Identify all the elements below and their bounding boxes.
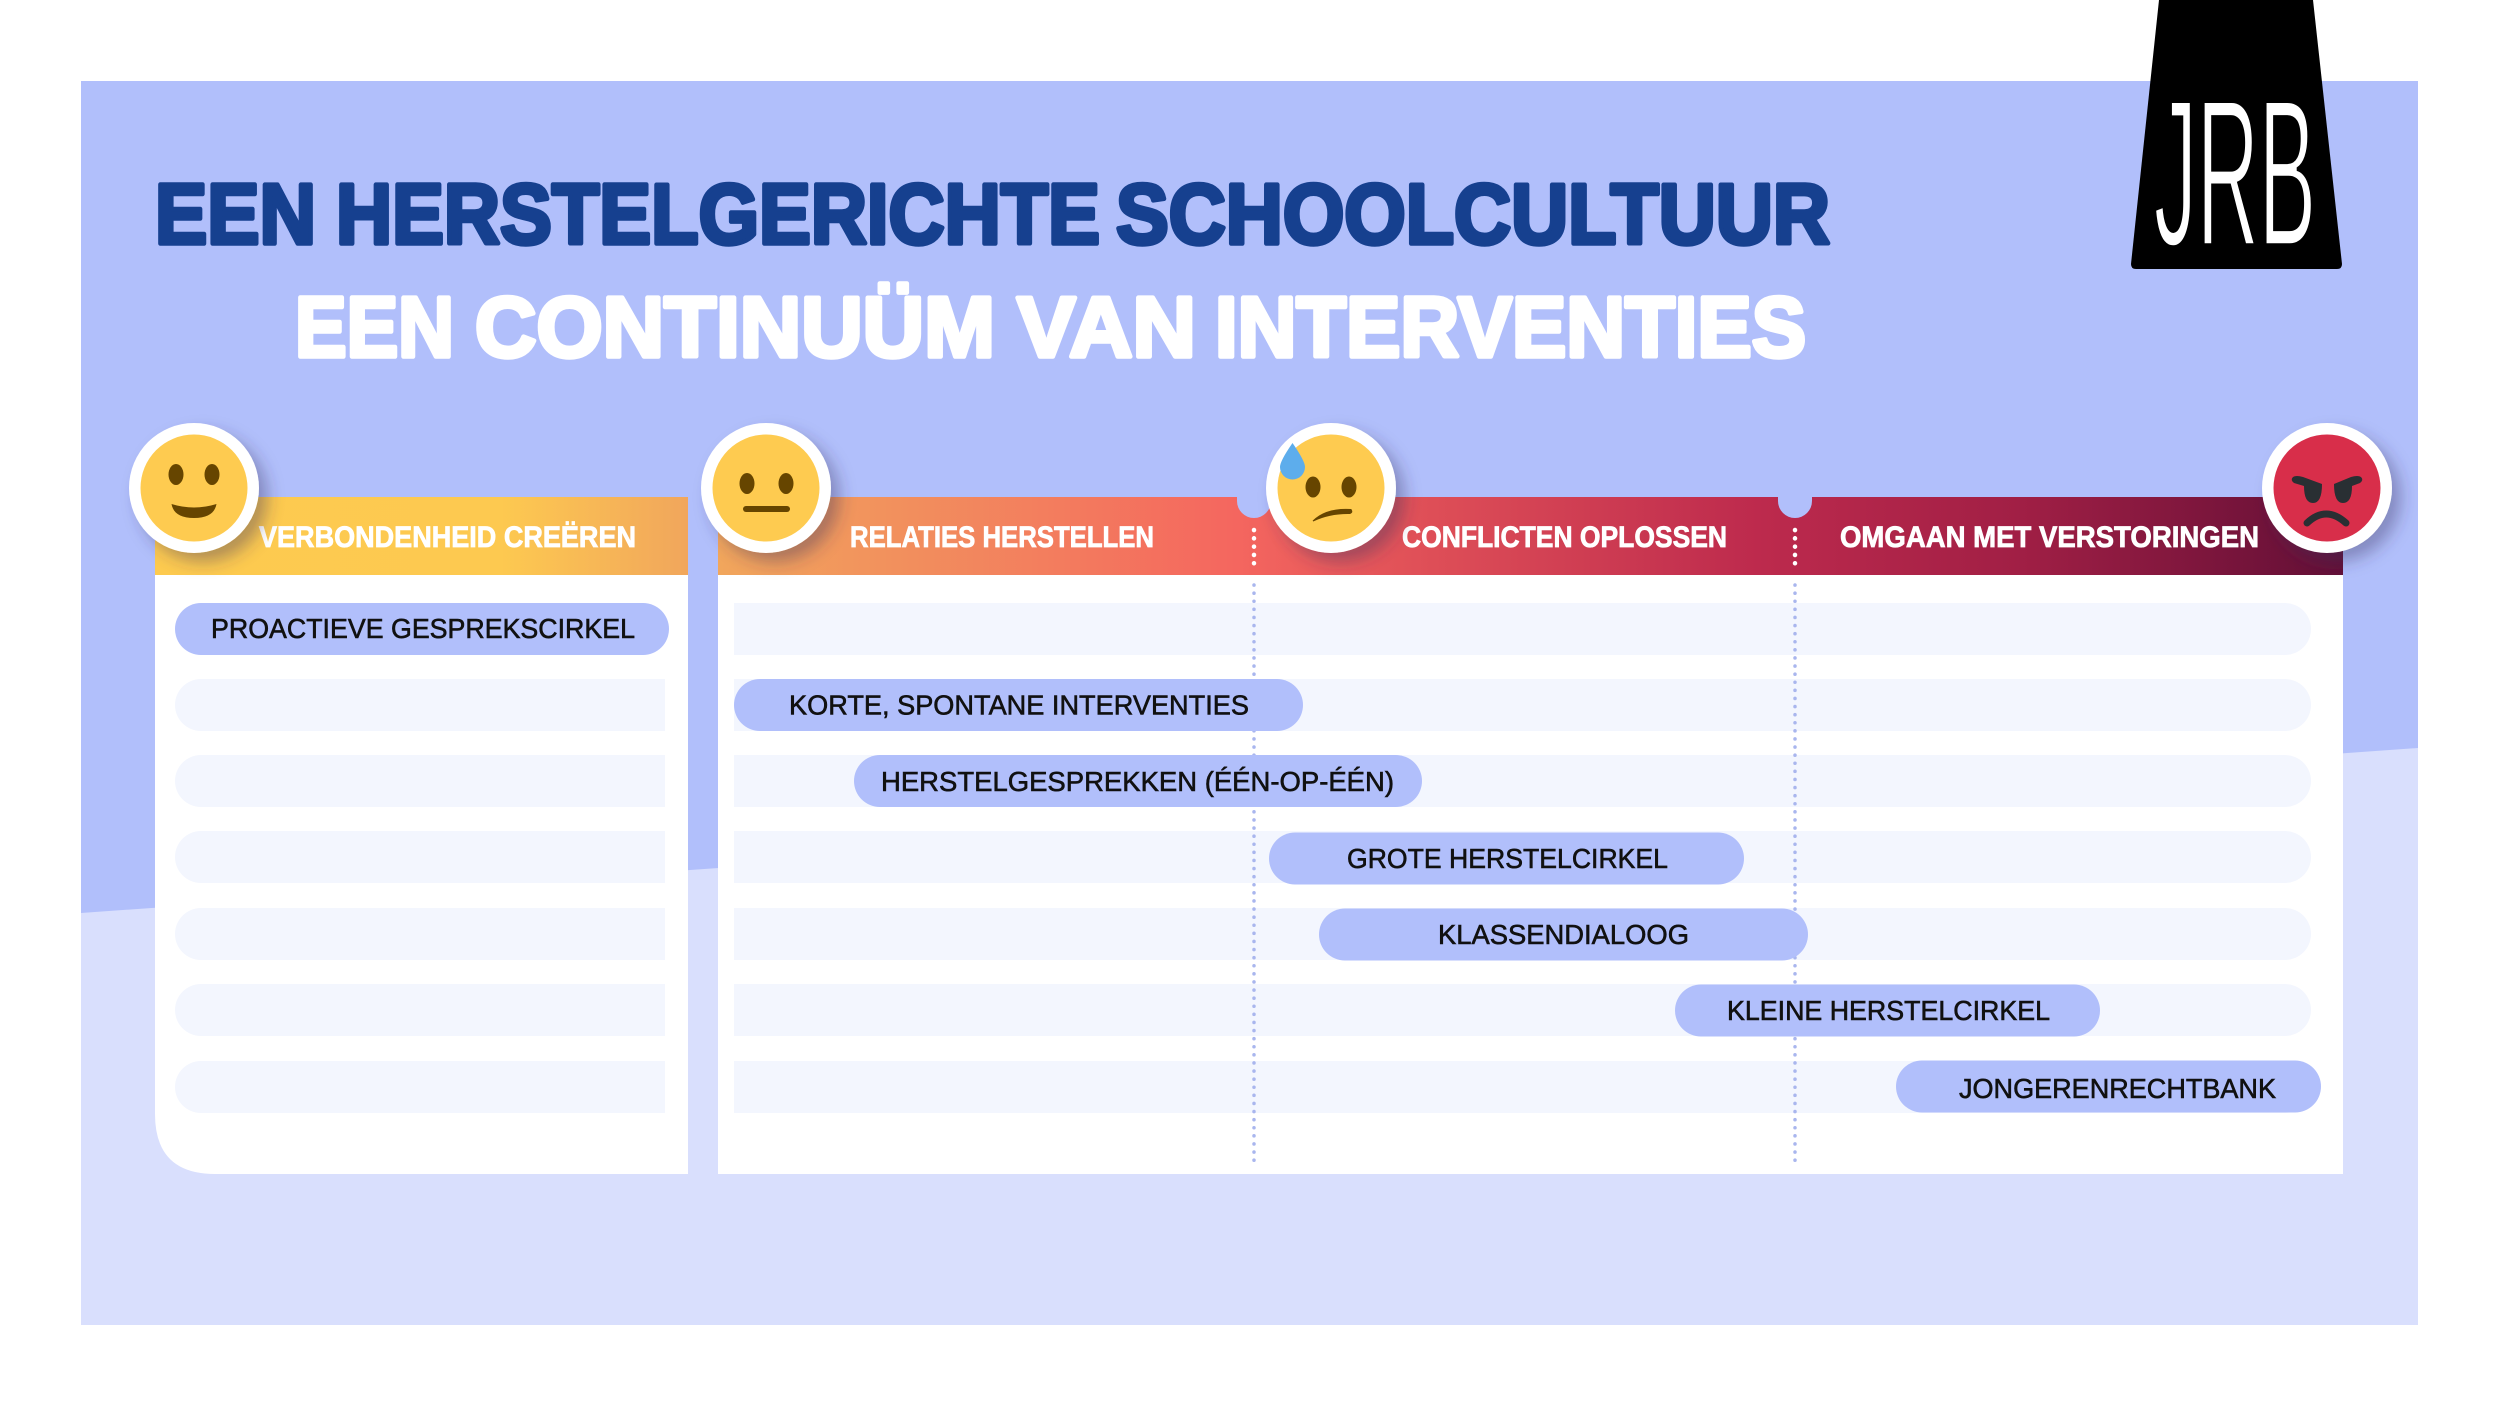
heading line 1: SCHOOLCULTUUR [1116, 168, 1830, 262]
pill: klassendialoog [1319, 908, 1808, 960]
heading line 1: HERSTELGERICHTE [336, 168, 1100, 262]
pill: grote herstelcirkel: GROTE HERSTELCIRKEL [1347, 843, 1668, 874]
header label: omgaan met verstoringen: OMGAAN MET VERSTORINGEN [1840, 521, 2259, 554]
empty rows [734, 603, 2311, 1113]
icon: worried face with sweat drop [1266, 423, 1396, 553]
dotted dividers [1254, 585, 1795, 1161]
heading line 2 [295, 280, 1806, 376]
panel: verbondenheid creëren [155, 497, 688, 1174]
pill: jongerenrechtbank [1896, 1060, 2321, 1112]
pill: kleine herstelcirkel [1675, 984, 2100, 1036]
pill: korte, spontane interventies [734, 679, 1303, 731]
header label: VERBONDENHEID CREËREN [259, 521, 636, 554]
icon: neutral face [701, 423, 831, 553]
pill: herstelgesprekken [854, 755, 1422, 807]
pill: korte, spontane interventies: KORTE, SPONTANE INTERVENTIES [789, 690, 1249, 720]
pill: proactieve gesprekscirkel: PROACTIEVE GESPREKSCIRKEL [211, 613, 635, 644]
logo: JRB [2131, 0, 2342, 290]
header label: relaties herstellen: RELATIES HERSTELLEN [850, 521, 1154, 554]
empty rows [175, 679, 665, 1113]
header bar [155, 497, 688, 575]
pill: klassendialoog: KLASSENDIALOOG [1438, 919, 1689, 950]
heading line 2: INTERVENTIES [1215, 280, 1806, 376]
pill: kleine herstelcirkel: KLEINE HERSTELCIRKEL [1727, 995, 2050, 1026]
icon: angry face [2262, 423, 2392, 553]
heading line 2: EEN [295, 280, 454, 376]
header bar [718, 497, 2343, 575]
pill: grote herstelcirkel [1269, 832, 1744, 884]
notches [1237, 497, 1812, 518]
title [155, 168, 1830, 376]
heading line 1 [155, 168, 1830, 262]
pill: herstelgesprekken: HERSTELGESPREKKEN (ÉÉN-OP-ÉÉN) [881, 766, 1394, 797]
panel: continuum [718, 497, 2343, 1174]
heading line 1: EEN [155, 168, 316, 262]
header label: conflicten oplossen: CONFLICTEN OPLOSSEN [1402, 521, 1727, 554]
heading line 2: CONTINUÜM [475, 280, 995, 376]
icon: smiling face [129, 423, 259, 553]
pill: proactieve gesprekscirkel [175, 603, 669, 655]
heading line 2: VAN [1017, 280, 1196, 376]
pill: jongerenrechtbank: JONGERENRECHTBANK [1959, 1073, 2277, 1104]
